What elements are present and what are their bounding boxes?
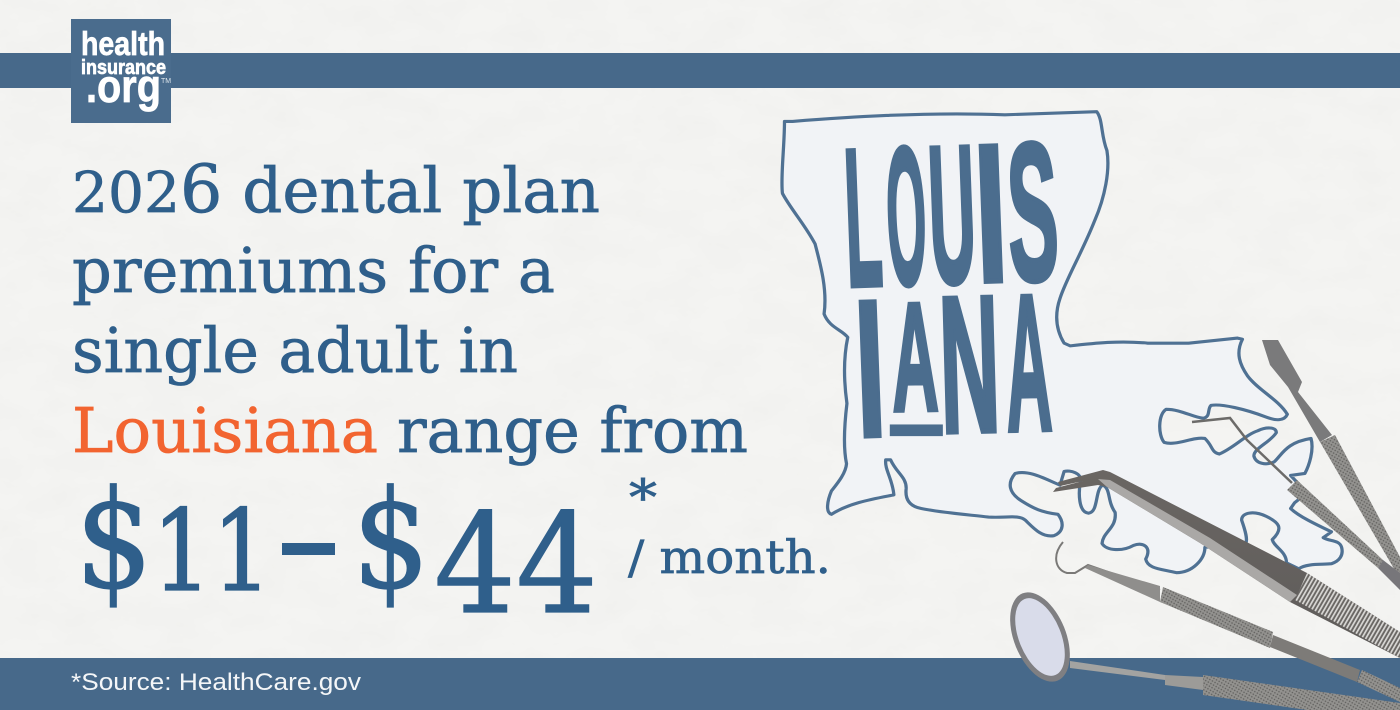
logo: healthinsurance.org: .org xyxy=(86,60,161,112)
instrument: explorer hook xyxy=(1056,542,1400,702)
dental instruments xyxy=(998,340,1400,710)
logo: healthinsurance.org: TM xyxy=(161,78,171,85)
headline: premiums for a xyxy=(72,234,555,307)
bottom banner bar xyxy=(0,658,1400,710)
logo: healthinsurance.org: insurance xyxy=(81,57,166,79)
instrument: tweezers xyxy=(1053,470,1400,658)
headline: single adult in xyxy=(72,314,518,387)
instrument: spatula xyxy=(1262,340,1400,579)
Louisiana state map: A xyxy=(891,271,939,444)
Louisiana state map xyxy=(782,102,1342,573)
price range: $ xyxy=(352,462,430,620)
headline xyxy=(72,151,748,467)
instrument: probe xyxy=(1192,418,1400,590)
state name: I: I xyxy=(852,261,889,478)
price range: $ xyxy=(75,462,153,620)
state name: LOUIS: L xyxy=(841,107,886,328)
state name: LOUIS: O xyxy=(882,106,930,327)
price range xyxy=(75,462,598,645)
headline: 2026 dental plan xyxy=(72,151,600,228)
state outline xyxy=(782,112,1342,573)
logo: healthinsurance.org: health xyxy=(81,25,165,62)
source note: *Source: HealthCare.gov xyxy=(71,669,361,696)
top banner bar xyxy=(0,53,1400,88)
headline: Louisiana xyxy=(72,394,378,467)
price range: 11 xyxy=(152,487,272,617)
asterisk: * xyxy=(629,469,657,527)
underline of small A xyxy=(890,424,943,436)
state name: LOUIS: U xyxy=(925,104,979,325)
Louisiana state map: S xyxy=(1004,102,1062,323)
headline: range from xyxy=(397,394,748,467)
Louisiana state map: A xyxy=(1003,255,1054,473)
per month label: / month. xyxy=(628,530,831,584)
state name: LOUIS: I xyxy=(971,103,1011,324)
instrument: mouth mirror xyxy=(998,584,1400,710)
state name: NA: N xyxy=(937,256,1002,474)
price range: 44 xyxy=(434,484,598,645)
logo: healthinsurance.org xyxy=(71,19,171,123)
